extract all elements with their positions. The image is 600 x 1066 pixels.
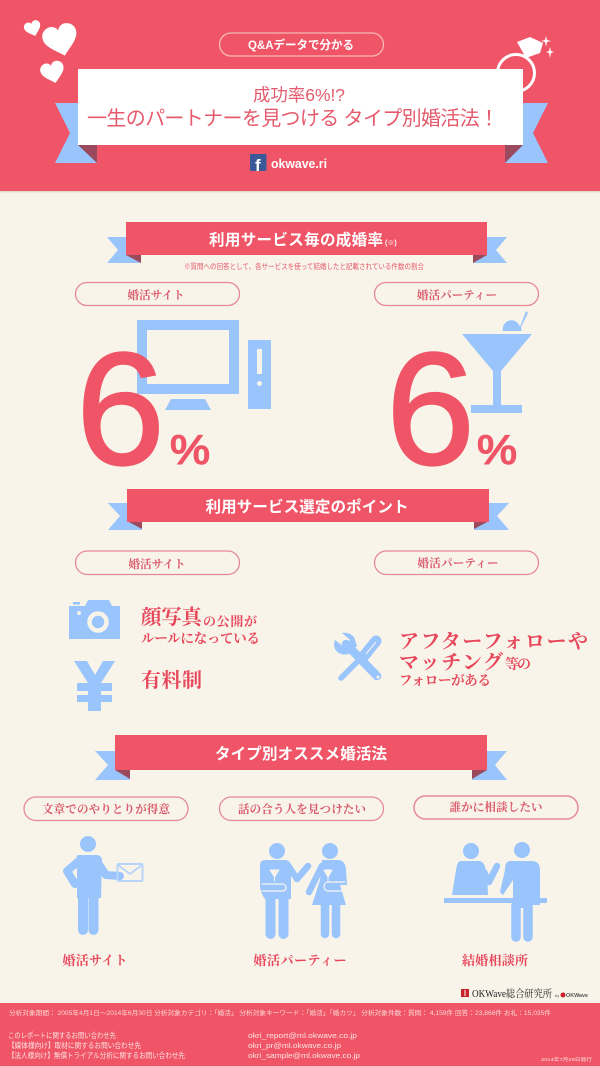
text: アフターフォローやマッチング等のフォローがある: マッチング	[399, 651, 503, 674]
footer panel	[0, 1003, 600, 1066]
logo: OKWave総合研究所: OKWave	[566, 993, 588, 999]
pill: 婚活パーティー (success rate): 婚活パーティー	[417, 288, 497, 302]
stat: 6% 婚活サイト	[76, 319, 210, 498]
contact labels: 【媒体様向け】取材に関するお問い合わせ先	[8, 1040, 141, 1050]
icon: cocktail glass	[462, 311, 532, 413]
stat: 6% 婚活パーティー: %	[477, 427, 517, 473]
logo: OKWave総合研究所: OKWave総合研究所	[472, 987, 552, 1000]
contact emails: okri_pr@ml.okwave.co.jp	[248, 1041, 341, 1050]
contact labels: 【法人様向け】無償トライアル分析に関するお問い合わせ先	[8, 1050, 185, 1060]
section banner: 利用サービス毎の成婚率	[107, 222, 507, 263]
subtitle pill: Q&Aデータで分かる	[248, 37, 354, 52]
icon: hearts	[23, 19, 82, 86]
contact labels	[8, 1030, 185, 1060]
section banner: タイプ別オススメ婚活法: タイプ別オススメ婚活法	[215, 744, 387, 763]
pill: 話の合う人を見つけたい: 話の合う人を見つけたい	[238, 802, 366, 816]
title ribbon	[55, 69, 548, 163]
text: アフターフォローやマッチング等のフォローがある: 等の	[505, 656, 531, 673]
pill: 婚活パーティー (points)	[374, 551, 538, 574]
icon: diamond ring	[498, 36, 554, 92]
footnote: ※質問への回答として、各サービスを使って結婚したと記載されている件数の割合	[184, 261, 424, 271]
pill: 文章でのやりとりが得意: 文章でのやりとりが得意	[42, 802, 172, 816]
section banner: 利用サービス毎の成婚率: 利用サービス毎の成婚率	[209, 230, 383, 249]
section banner: 利用サービス選定のポイント: 利用サービス選定のポイント	[206, 497, 408, 516]
icon: yen	[74, 661, 115, 711]
pill: 婚活サイト (success rate): 婚活サイト	[128, 288, 184, 302]
text: アフターフォローやマッチング等のフォローがある	[399, 630, 588, 688]
text: 有料制: 有料制	[141, 669, 202, 692]
facebook link: okwave.ri	[271, 156, 327, 171]
section banner: タイプ別オススメ婚活法	[95, 735, 507, 780]
label: 婚活サイト: 婚活サイト	[62, 953, 128, 968]
pill: 誰かに相談したい	[414, 796, 578, 819]
contact emails: okri_sample@ml.okwave.co.jp	[248, 1051, 360, 1060]
icon: man and woman with drinks	[260, 843, 347, 934]
pill: 話の合う人を見つけたい	[220, 797, 384, 820]
pill: 文章でのやりとりが得意	[24, 797, 188, 820]
stat: 6% 婚活パーティー	[386, 319, 517, 498]
text: 顔写真の公開がルールになっている: の公開が	[203, 614, 257, 630]
pill: 婚活パーティー (points): 婚活パーティー	[418, 556, 498, 570]
pill: 婚活サイト (points)	[76, 551, 240, 574]
label: 婚活パーティー: 婚活パーティー	[254, 953, 346, 968]
icon: camera	[69, 600, 120, 639]
icon: desktop computer	[137, 320, 271, 410]
icon: wrench and screwdriver	[334, 633, 380, 678]
text: 顔写真の公開がルールになっている	[141, 605, 260, 646]
stat: 6% 婚活サイト: %	[170, 427, 210, 473]
text: アフターフォローやマッチング等のフォローがある: フォローがある	[399, 673, 491, 688]
contact labels: このレポートに関するお問い合わせ先	[8, 1030, 116, 1040]
subtitle pill	[220, 33, 384, 56]
title text: 一生のパートナーを見つける タイプ別婚活法！	[87, 107, 499, 130]
title text	[87, 85, 499, 130]
contact emails	[248, 1031, 360, 1060]
text: 顔写真の公開がルールになっている: 顔写真	[141, 605, 204, 629]
title text: 成功率6%!?	[253, 85, 345, 105]
pill: 誰かに相談したい: 誰かに相談したい	[450, 800, 542, 814]
section banner: 利用サービス選定のポイント	[108, 489, 509, 530]
header panel	[0, 0, 600, 192]
pill: 婚活パーティー (success rate)	[374, 282, 538, 306]
date: 2014年7月29日発行	[541, 1056, 593, 1063]
pill: 婚活サイト (points): 婚活サイト	[128, 557, 186, 571]
facebook link	[250, 154, 327, 175]
facebook link: f	[255, 156, 261, 175]
logo: OKWave総合研究所: by	[555, 993, 559, 998]
icon: person with envelope	[67, 836, 142, 930]
section banner: 利用サービス毎の成婚率: (※)	[385, 239, 397, 247]
label: 結婚相談所: 結婚相談所	[462, 953, 528, 968]
logo: OKWave総合研究所	[461, 987, 588, 1000]
analysis conditions: 分析対象期間： 2005年4月1日～2014年6月30日 分析対象カテゴリ：「婚活」 分析対象キーワード：「婚活」「婚カツ」 分析対象件数：質問： 4,159件 回答：23,868件 お礼：15,035件	[9, 1008, 552, 1017]
contact emails: okri_report@ml.okwave.co.jp	[248, 1031, 357, 1040]
text: アフターフォローやマッチング等のフォローがある: アフターフォローや	[399, 630, 588, 653]
pill: 婚活サイト (success rate)	[76, 282, 240, 306]
stat: 6% 婚活サイト: 6	[76, 319, 165, 498]
icon: two people at consultation desk	[444, 842, 547, 937]
stat: 6% 婚活パーティー: 6	[386, 319, 475, 498]
text: 顔写真の公開がルールになっている: ルールになっている	[141, 631, 260, 646]
